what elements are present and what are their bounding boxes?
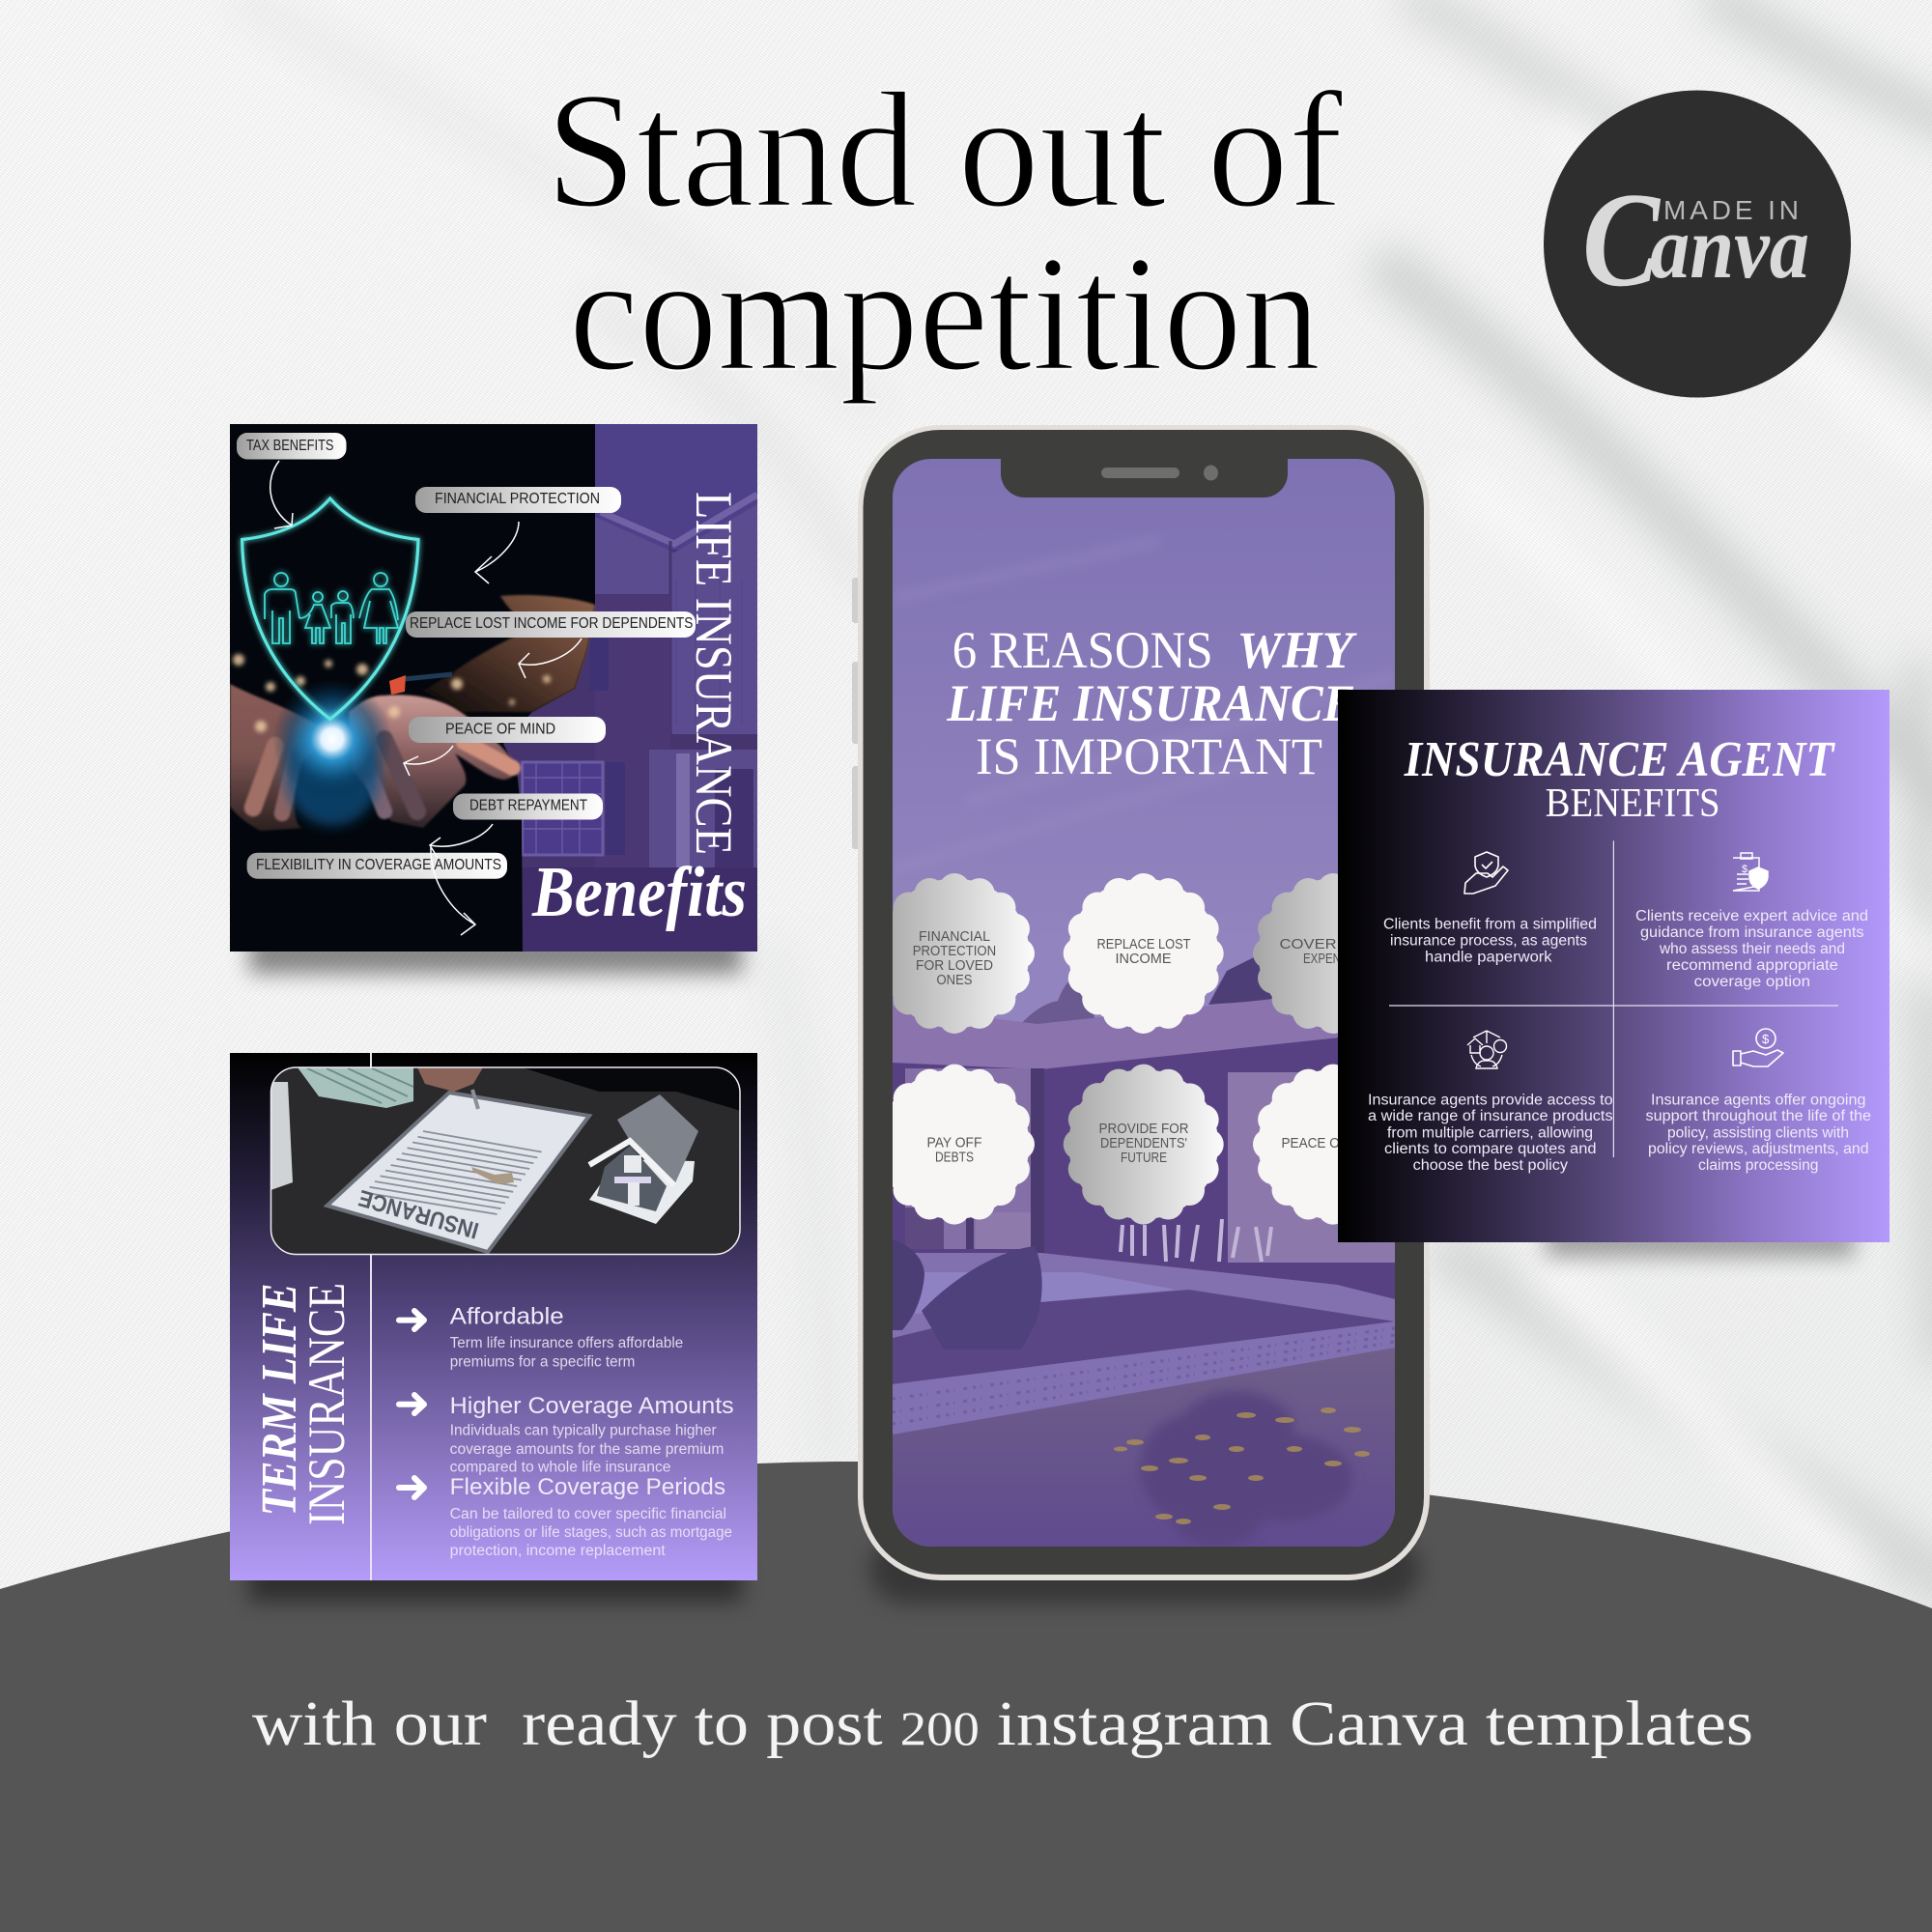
curved arrows (270, 461, 582, 935)
benefit: higher coverage: coverage amounts for the same premium (450, 1441, 724, 1458)
pill: tax benefits (237, 433, 346, 460)
tagline: with our ready to post 200 instagram Canva templates (252, 1689, 1753, 1759)
roof band (893, 983, 1395, 1069)
benefit: higher coverage: Higher Coverage Amounts (450, 1393, 734, 1419)
camera (1204, 466, 1218, 481)
benefit text: ongoing support: support throughout the life of the (1646, 1108, 1871, 1124)
scallop badge: financial protection: ONES (937, 972, 972, 988)
pill: debt repayment (453, 794, 603, 819)
benefit text: expert advice: who assess their needs and (1659, 941, 1845, 957)
scallop badge: cover final expenses: COVER FINAL (1279, 936, 1387, 952)
shadow: agent panel (1546, 1225, 1855, 1258)
phone shadow (869, 1536, 1420, 1604)
benefit: flexible periods (450, 1474, 732, 1559)
shrub (1140, 1391, 1352, 1546)
white table and stools (1121, 1219, 1271, 1262)
photo: insurance paper and house: INSURANCE (355, 1184, 482, 1243)
icon: hand with dollar coin (1733, 1029, 1783, 1066)
scallop badge: peace of mind: PEACE OF MIND (1281, 1135, 1385, 1151)
pill: financial protection: FINANCIAL PROTECTION (435, 491, 600, 507)
benefit text: wide range of products: clients to compare quotes and (1384, 1141, 1596, 1157)
benefit: affordable: Affordable (450, 1303, 564, 1329)
benefit text: ongoing support (1646, 1093, 1871, 1174)
shrub flowers (1114, 1407, 1370, 1524)
benefit: affordable: premiums for a specific term (450, 1353, 635, 1370)
shield icon (242, 498, 418, 719)
photo: insurance paper and house (270, 1067, 741, 1255)
scallop badge: financial protection: FINANCIAL (919, 928, 990, 945)
wristband (389, 674, 452, 695)
dark mat (893, 1290, 1395, 1384)
pill: tax benefits: TAX BENEFITS (246, 438, 334, 454)
trees (1021, 979, 1095, 1024)
panel: life insurance benefits (230, 424, 757, 952)
benefit text: ongoing support: claims processing (1698, 1157, 1818, 1174)
terrace floor (893, 1253, 1395, 1352)
right hand (349, 695, 516, 828)
badge: made in Canva: MADE IN (1663, 195, 1799, 225)
benefit text: simplified process (1383, 916, 1597, 966)
pill: flexibility (247, 853, 507, 879)
vertical title: insurance: INSURANCE (298, 1283, 355, 1525)
left hand (230, 683, 316, 831)
benefit text: wide range of products: a wide range of insurance products (1368, 1108, 1613, 1124)
benefit text: expert advice: recommend appropriate (1666, 957, 1838, 974)
scallop badge: cover final expenses: EXPENSES (1303, 951, 1363, 967)
badge: made in Canva: anva (1650, 198, 1809, 297)
benefits script title: Benefits (531, 853, 747, 932)
shadow: life insurance panel (249, 935, 742, 974)
panel heading: INSURANCE AGENT (1404, 732, 1835, 787)
screen heading: 6 REASONS (952, 621, 1213, 679)
scallop badge: replace lost income (1068, 879, 1218, 1028)
scallop badge: replace lost income: REPLACE LOST (1097, 936, 1190, 952)
pill: replace lost income: REPLACE LOST INCOME FOR DEPENDENTS (410, 615, 694, 632)
pill: peace of mind (409, 717, 606, 743)
benefit: affordable (450, 1303, 683, 1370)
phone body (858, 425, 1430, 1580)
phone mockup (852, 425, 1430, 1580)
egg chairs (922, 1246, 1042, 1350)
icon: clipboard with shield: $ (1742, 864, 1747, 875)
benefit text: wide range of products: Insurance agents provide access to (1368, 1093, 1613, 1109)
benefit text: simplified process: insurance process, as agents (1390, 933, 1587, 950)
side buttons (852, 578, 860, 849)
scallop badge: peace of mind (1258, 1069, 1408, 1219)
benefit text: simplified process: handle paperwork (1425, 950, 1552, 966)
benefit text: wide range of products: from multiple carriers, allowing (1387, 1124, 1593, 1141)
benefit text: ongoing support: Insurance agents offer ongoing (1651, 1093, 1866, 1109)
benefit: flexible periods: Can be tailored to cover specific financial (450, 1506, 726, 1522)
scallop badge: cover final expenses (1258, 879, 1408, 1028)
badge: made in Canva: C (1582, 165, 1661, 315)
screen heading: LIFE INSURANCE (946, 674, 1355, 732)
scallop badge: financial protection: FOR LOVED (916, 957, 993, 974)
panel: term life insurance (230, 1053, 757, 1580)
badge: made in Canva (1544, 91, 1851, 398)
benefit: higher coverage (450, 1393, 734, 1476)
pill: flexibility: FLEXIBILITY IN COVERAGE AMOUNTS (256, 857, 501, 873)
screen heading: WHY (1236, 621, 1358, 679)
icon: hand with shield (1464, 852, 1508, 894)
dark curved bottom band (0, 1462, 1932, 1932)
panel heading: BENEFITS (1546, 781, 1720, 826)
title: competition (569, 222, 1321, 406)
benefit text: expert advice: coverage option (1694, 974, 1810, 990)
icon: house, shield and person (1467, 1031, 1507, 1068)
icon: hand with dollar coin: $ (1762, 1032, 1770, 1046)
forearm (423, 595, 595, 712)
family icon (265, 573, 398, 643)
screen heading: IS IMPORTANT (976, 727, 1322, 785)
scallop badge: pay off debts: DEBTS (935, 1150, 974, 1165)
benefit text: expert advice: guidance from insurance agents (1640, 924, 1864, 941)
building facade (893, 1032, 1395, 1299)
benefit: affordable: Term life insurance offers affordable (450, 1335, 683, 1351)
benefit: higher coverage: Individuals can typically purchase higher (450, 1423, 717, 1439)
screen background photo (893, 459, 1395, 1550)
benefit text: wide range of products (1368, 1093, 1613, 1174)
windows (905, 1068, 1395, 1263)
bokeh lights (233, 654, 551, 732)
scallop badge: financial protection (879, 879, 1030, 1028)
title (546, 59, 1344, 406)
scallop badge: provide for dependents: FUTURE (1121, 1150, 1167, 1166)
pill: debt repayment: DEBT REPAYMENT (469, 798, 587, 814)
scallop badge: provide for dependents: DEPENDENTS' (1100, 1135, 1187, 1151)
vertical title: LIFE INSURANCE (685, 492, 743, 855)
benefit text: ongoing support: policy reviews, adjustments, and (1648, 1141, 1869, 1157)
benefit text: wide range of products: choose the best policy (1413, 1157, 1568, 1174)
lawn (893, 1348, 1395, 1547)
title: Stand out of (546, 59, 1344, 242)
vertical title: term life: TERM LIFE (252, 1283, 307, 1516)
quadrant dividers (1389, 840, 1838, 1157)
benefit text: ongoing support: policy, assisting clients with (1667, 1124, 1849, 1141)
scallop badge: pay off debts (879, 1069, 1030, 1219)
scallop badge: provide for dependents: PROVIDE FOR (1099, 1121, 1189, 1137)
scallop badge: financial protection: PROTECTION (913, 943, 996, 959)
speaker (1101, 468, 1179, 478)
scallop badge: replace lost income: INCOME (1115, 951, 1171, 967)
dark person area (230, 424, 595, 952)
pill: peace of mind: PEACE OF MIND (445, 721, 555, 738)
scallop badge: pay off debts: PAY OFF (927, 1134, 981, 1151)
notch (1001, 459, 1288, 497)
phone screen (879, 459, 1408, 1550)
panel heading (1404, 732, 1835, 826)
icon: clipboard with shield (1733, 853, 1768, 891)
pill: replace lost income (406, 611, 696, 638)
arrow icons (399, 1311, 424, 1497)
pill: financial protection (415, 487, 621, 513)
benefit: higher coverage: compared to whole life insurance (450, 1459, 670, 1476)
screen heading (946, 621, 1358, 785)
house photo (503, 424, 757, 952)
scallop badge: provide for dependents (1068, 1069, 1218, 1219)
benefit text: expert advice (1635, 908, 1868, 990)
benefit: flexible periods: Flexible Coverage Periods (450, 1474, 725, 1500)
light glow (272, 679, 392, 826)
benefit: flexible periods: obligations or life stages, such as mortgage (450, 1524, 732, 1541)
panel: insurance agent benefits (1338, 690, 1889, 1242)
gravel (893, 1321, 1395, 1435)
vertical divider (370, 1053, 372, 1580)
benefit text: expert advice: Clients receive expert advice and (1635, 908, 1868, 924)
benefit text: simplified process: Clients benefit from a simplified (1383, 916, 1597, 933)
shadow: term life panel (249, 1563, 742, 1602)
benefit: flexible periods: protection, income replacement (450, 1543, 666, 1559)
